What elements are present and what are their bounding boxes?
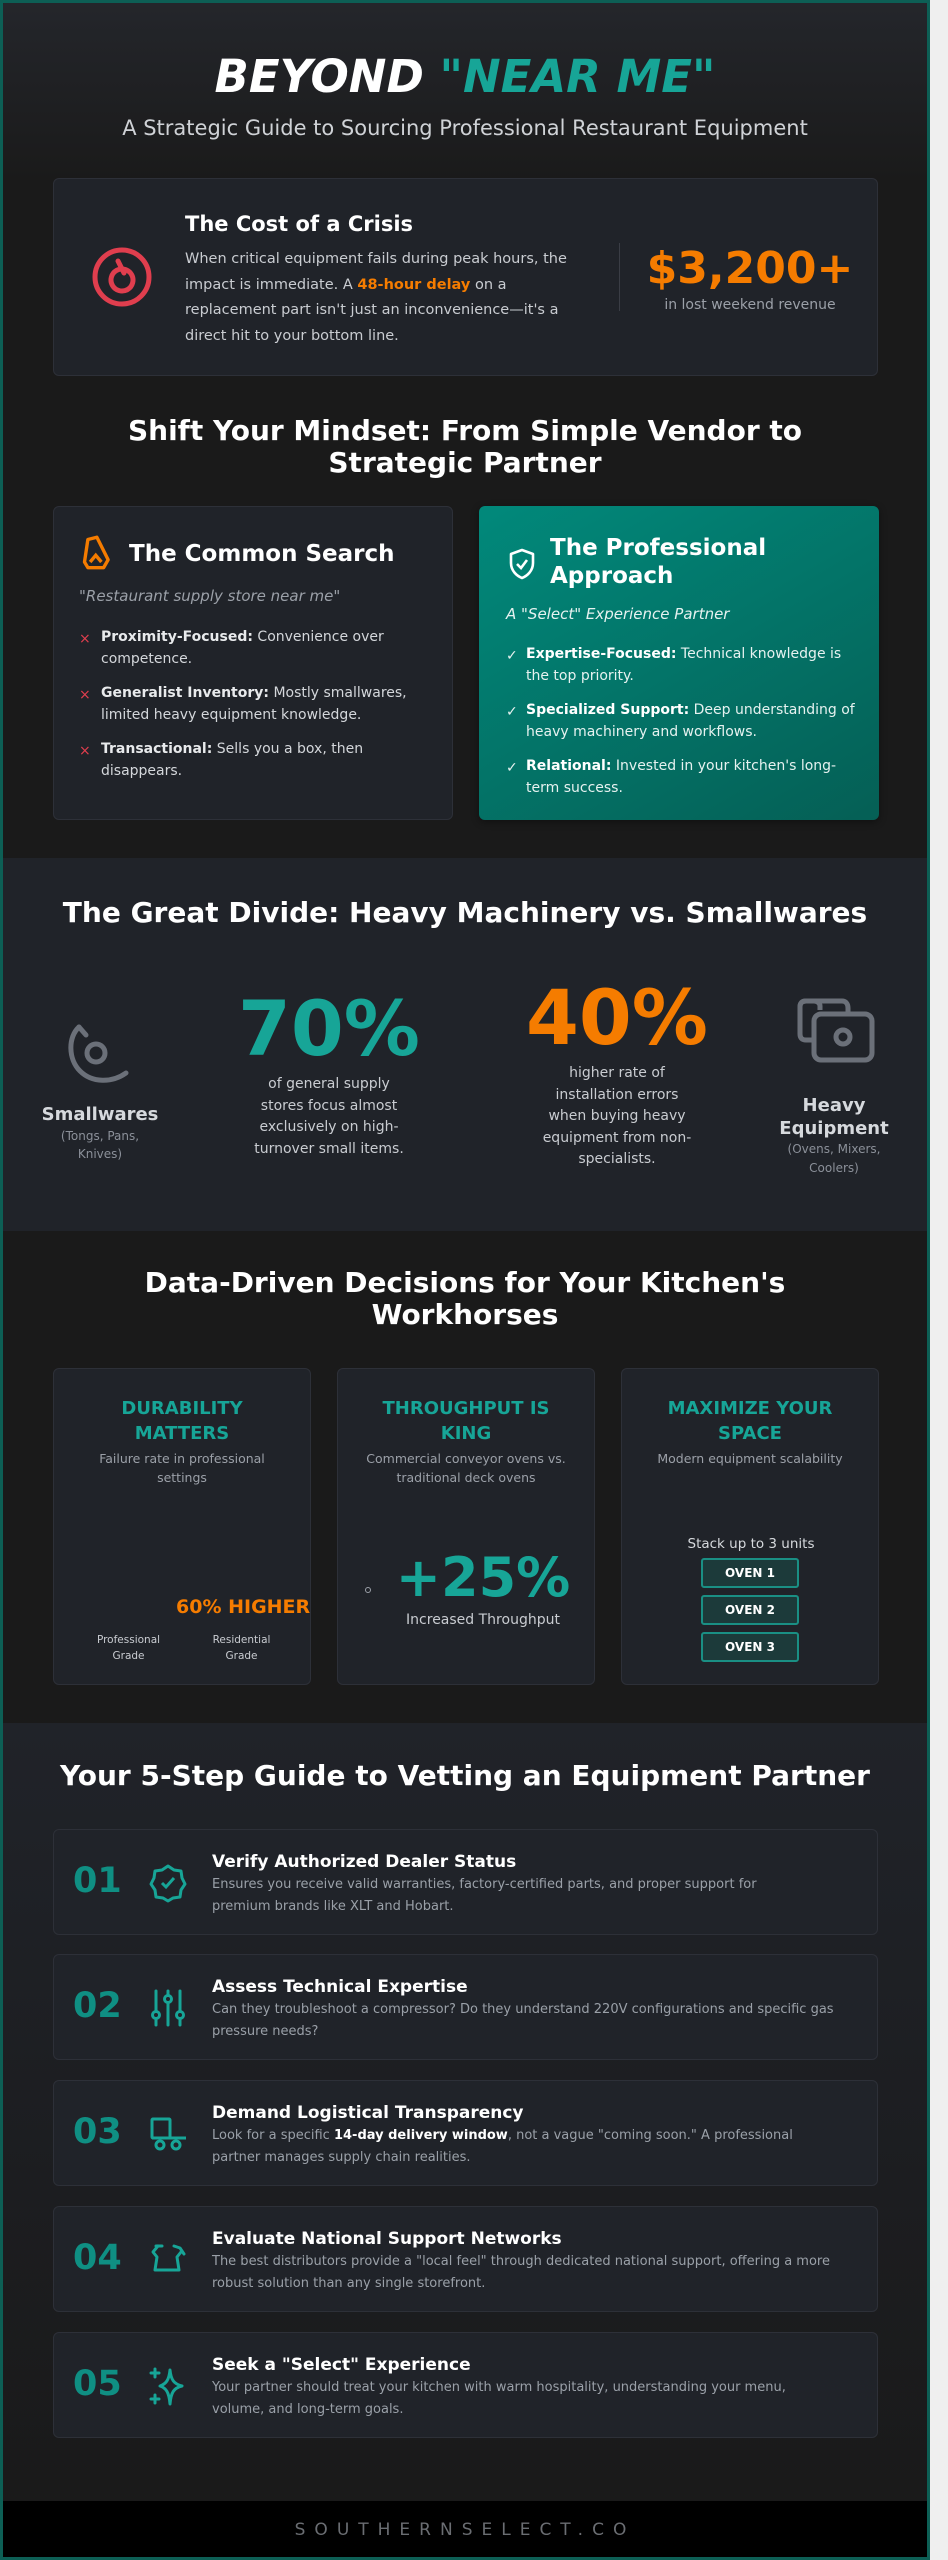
icon: crisis xyxy=(92,248,152,306)
section: great divide xyxy=(3,858,927,1231)
heading: data-driven decisions: Data-Driven Decisions for Your Kitchen's xyxy=(145,1266,785,1299)
list: professional benefits: Relational: Invested in your kitchen's long-term success. xyxy=(526,758,836,796)
step 01 xyxy=(53,1829,878,1935)
icon: smallwares xyxy=(68,1024,128,1083)
stat: 70% xyxy=(238,984,420,1156)
axis labels: Grade xyxy=(112,1650,144,1662)
list: common search drawbacks: × xyxy=(79,743,91,759)
oven stack: Stack up to 3 units xyxy=(688,1536,814,1552)
heading: the professional approach: The Professional xyxy=(550,535,766,561)
list: common search drawbacks xyxy=(79,629,407,779)
panel: the common search xyxy=(53,506,453,820)
stat: $3,200+: in lost weekend revenue xyxy=(664,297,836,313)
step 01: Ensures you receive valid warranties, factory-certified parts, and proper support for premium brands like XLT and Hobart. xyxy=(212,1877,757,1914)
step 04: 04 xyxy=(73,2238,122,2278)
title: BEYOND "NEAR ME" xyxy=(215,50,715,103)
heading: DURABILITY xyxy=(121,1398,243,1419)
footer xyxy=(3,2501,927,2560)
heading: cost of a crisis: The Cost of a Crisis xyxy=(185,212,413,236)
list: professional benefits: ✓ xyxy=(506,648,518,664)
label: heavy equipment: Heavy xyxy=(803,1095,865,1116)
oven stack: OVEN 1 xyxy=(725,1566,775,1580)
step 04: The best distributors provide a "local feel" through dedicated national support, offering a more robust solution than any single storefront. xyxy=(212,2254,830,2291)
list: common search drawbacks: × xyxy=(79,687,91,703)
heading: the professional approach xyxy=(550,535,766,589)
stat: +25%: Increased Throughput xyxy=(406,1612,560,1628)
list: common search drawbacks: Proximity-Focused: Convenience over competence. xyxy=(101,629,384,667)
heading: MATTERS xyxy=(135,1423,229,1444)
step 02: 02 xyxy=(73,1986,122,2026)
stat: 40% xyxy=(526,973,708,1167)
icon: sliders xyxy=(151,1990,185,2026)
icon: search/house xyxy=(82,536,110,570)
stat: 40%: higher rate of installation errors when buying heavy equipment from non-specialists. xyxy=(543,1065,691,1167)
oven stack xyxy=(688,1536,814,1662)
subtitle: Failure rate in professional settings xyxy=(99,1451,265,1485)
step 05: Seek a "Select" Experience xyxy=(212,2355,471,2375)
heading xyxy=(668,1398,832,1444)
icon: heavy equipment xyxy=(798,998,874,1062)
heading: THROUGHPUT IS xyxy=(382,1398,549,1419)
icon: sparkles xyxy=(150,2368,184,2406)
label: smallwares: Smallwares xyxy=(42,1104,158,1125)
list: professional benefits: ✓ xyxy=(506,704,518,720)
step 03 xyxy=(53,2080,878,2186)
label: smallwares xyxy=(42,1104,158,1161)
heading: shift your mindset: Shift Your Mindset: From Simple Vendor to xyxy=(128,414,802,447)
label: smallwares: Knives) xyxy=(78,1147,122,1161)
list: professional benefits: Expertise-Focused: Technical knowledge is the top priority. xyxy=(526,646,841,684)
heading xyxy=(121,1398,243,1444)
stat: 70%: 70% xyxy=(238,984,420,1073)
stat: 70%: of general supply stores focus almost exclusively on high-turnover small items. xyxy=(254,1076,404,1156)
panel: durability matters xyxy=(53,1368,311,1685)
list: common search drawbacks: × xyxy=(79,631,91,647)
panel: durability matters: Grade xyxy=(225,1650,258,1662)
step 03: 03 xyxy=(73,2112,122,2152)
list: common search drawbacks: Transactional: Sells you a box, then disappears. xyxy=(101,741,363,779)
icon: support arrows xyxy=(152,2244,186,2272)
panel: the professional approach xyxy=(479,506,879,820)
step 04: Evaluate National Support Networks xyxy=(212,2229,562,2249)
axis labels: Professional xyxy=(97,1634,160,1646)
heading: the common search: The Common Search xyxy=(129,541,394,567)
step 05: Your partner should treat your kitchen with warm hospitality, understanding your menu, volume, and long-term goals. xyxy=(212,2380,786,2417)
label: smallwares: (Tongs, Pans, xyxy=(61,1129,139,1143)
step 02 xyxy=(53,1954,878,2060)
step 04 xyxy=(53,2206,878,2312)
icon: badge check xyxy=(150,1864,186,1902)
step 05 xyxy=(53,2332,878,2438)
callout: 60% higher: 60% HIGHER xyxy=(176,1596,310,1618)
panel: cost of a crisis xyxy=(53,178,878,376)
panel: maximize your space xyxy=(621,1368,879,1685)
heading: shift your mindset: Strategic Partner xyxy=(328,446,602,479)
list: common search drawbacks: Generalist Inventory: Mostly smallwares, limited heavy equipment knowledge. xyxy=(101,685,407,723)
heading xyxy=(382,1398,549,1444)
heading: great divide: The Great Divide: Heavy Machinery vs. Smallwares xyxy=(63,896,867,929)
step 02: Can they troubleshoot a compressor? Do they understand 220V configurations and specific gas pressure needs? xyxy=(212,2002,834,2039)
heading: 5-step guide: Your 5-Step Guide to Vetting an Equipment Partner xyxy=(60,1759,870,1792)
list: professional benefits xyxy=(506,646,855,796)
stat: +25%: +25% xyxy=(396,1546,570,1609)
panel: throughput is king xyxy=(337,1368,595,1685)
step 03: Demand Logistical Transparency xyxy=(212,2103,524,2123)
step 02: Assess Technical Expertise xyxy=(212,1977,468,1997)
heading: the professional approach: Approach xyxy=(550,563,673,589)
step 05: 05 xyxy=(73,2364,122,2404)
text: crisis description: When critical equipment fails during peak hours, the impact is immediate. A 48-hour delay on a replacement part isn't just an inconvenience—it's a direct hit to your bottom line. xyxy=(185,251,567,344)
footer: SOUTHERNSELECT.CO xyxy=(295,2520,635,2540)
list: professional benefits: Specialized Support: Deep understanding of heavy machinery and workflows. xyxy=(526,702,855,740)
heading: MAXIMIZE YOUR xyxy=(668,1398,832,1419)
oven stack: OVEN 2 xyxy=(725,1603,775,1617)
heading: data-driven decisions xyxy=(145,1266,785,1331)
subtitle: Modern equipment scalability xyxy=(657,1451,843,1466)
step 03: Look for a specific 14-day delivery window, not a vague "coming soon." A professional partner manages supply chain realities. xyxy=(212,2128,793,2165)
icon: truck/dolly xyxy=(150,2118,186,2150)
step 01: Verify Authorized Dealer Status xyxy=(212,1852,516,1872)
label: heavy equipment: Equipment xyxy=(779,1118,889,1139)
header background xyxy=(3,3,927,183)
oven stack: OVEN 3 xyxy=(725,1640,775,1654)
heading: SPACE xyxy=(718,1423,782,1444)
quote: "Restaurant supply store near me" xyxy=(79,587,340,605)
list: professional benefits: ✓ xyxy=(506,760,518,776)
label: heavy equipment: Coolers) xyxy=(809,1161,859,1175)
subtitle: A "Select" Experience Partner xyxy=(506,605,729,623)
axis labels xyxy=(97,1634,160,1662)
subtitle: Commercial conveyor ovens vs. traditional deck ovens xyxy=(366,1451,566,1485)
subtitle: A Strategic Guide to Sourcing Professional Restaurant Equipment xyxy=(122,116,808,140)
stat: 40%: 40% xyxy=(526,973,708,1062)
stat: $3,200+: $3,200+ xyxy=(647,243,853,294)
step 01: 01 xyxy=(73,1861,122,1901)
section: 5-step guide xyxy=(3,1723,927,2501)
heading: shift your mindset xyxy=(128,414,802,479)
heading: data-driven decisions: Workhorses xyxy=(372,1298,558,1331)
icon: shield check xyxy=(510,548,534,580)
label: heavy equipment xyxy=(779,1095,889,1175)
panel: durability matters: Residential xyxy=(213,1634,270,1646)
label: heavy equipment: (Ovens, Mixers, xyxy=(788,1142,880,1156)
heading: KING xyxy=(441,1423,491,1444)
